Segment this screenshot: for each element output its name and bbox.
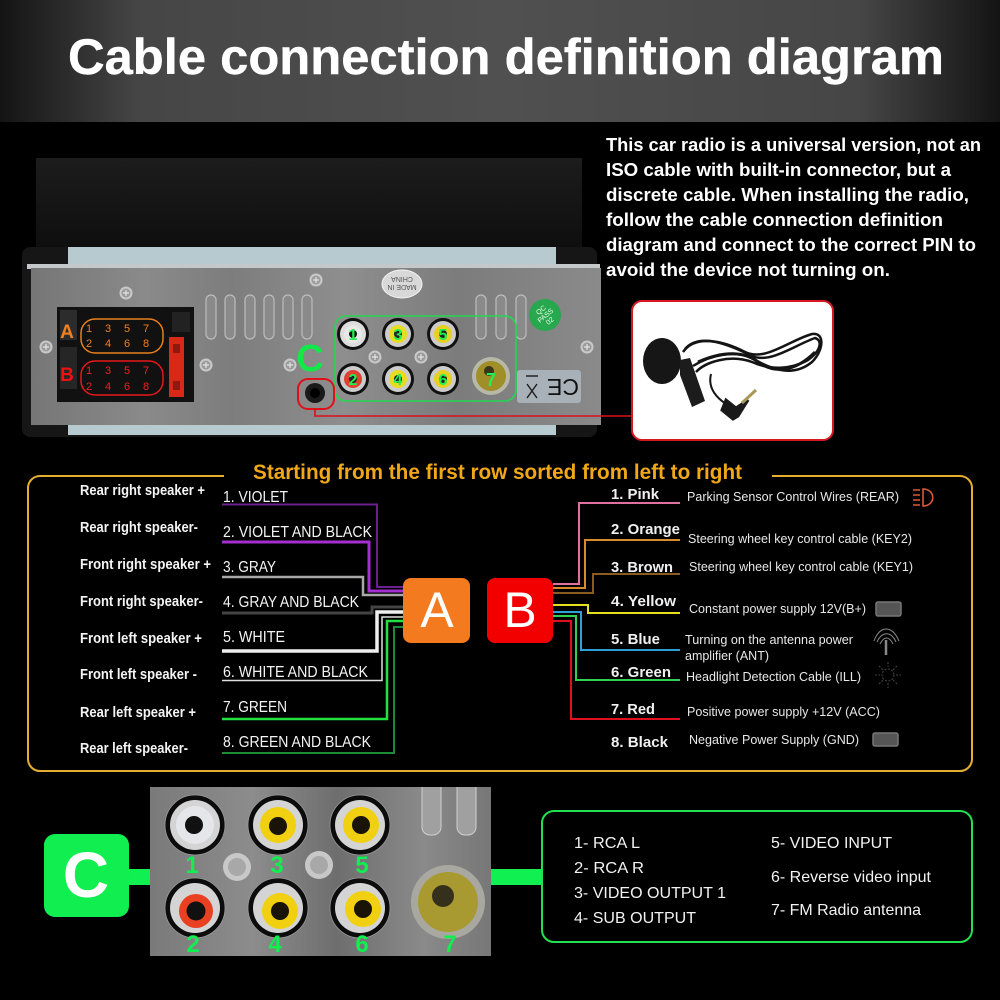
vents <box>150 775 491 835</box>
connector A function labels: Rear left speaker- <box>80 740 188 757</box>
icon: battery constant power <box>876 602 901 616</box>
connector B: 5 <box>124 365 130 377</box>
connector B descriptions <box>685 490 913 747</box>
connector A function labels: Front right speaker + <box>80 556 211 573</box>
letter C: C <box>296 338 324 380</box>
connector B wires <box>553 503 680 719</box>
connector B: 1 <box>86 365 92 377</box>
connector A wire names: 5. WHITE <box>223 629 285 646</box>
connector A wire names: 2. VIOLET AND BLACK <box>223 524 372 541</box>
connector B descriptions: Steering wheel key control cable (KEY2) <box>688 532 912 546</box>
connector C photo <box>150 775 491 958</box>
CE label: CE <box>547 374 579 400</box>
RCA jack numbers: 3 <box>394 327 403 344</box>
legend right column <box>771 835 932 919</box>
RCA jack numbers: 4 <box>394 372 403 389</box>
title: Cable connection definition diagram <box>68 29 944 85</box>
connector B descriptions: Headlight Detection Cable (ILL) <box>686 670 861 684</box>
connector A wire names: 6. WHITE AND BLACK <box>223 664 368 681</box>
vents left <box>206 295 312 339</box>
connector B wire names: 1. Pink <box>611 486 660 503</box>
QC pass sticker: PASS <box>537 307 555 325</box>
QC pass sticker <box>529 299 561 331</box>
connector B wire names: 6. Green <box>611 664 671 681</box>
icon: headlight sun <box>875 662 901 688</box>
connector B wire names: 4. Yellow <box>611 593 676 610</box>
connector A badge <box>403 578 470 643</box>
connector A function labels: Rear left speaker + <box>80 704 196 721</box>
connector B: 2 <box>86 381 92 393</box>
connector B: 3 <box>105 365 111 377</box>
connector A wire names: 8. GREEN AND BLACK <box>223 734 371 751</box>
connector A wires <box>222 504 404 753</box>
connector A: 8 <box>143 338 149 350</box>
connector B wire names: 8. Black <box>611 734 669 751</box>
screws <box>40 274 594 372</box>
intro paragraph: ISO cable with built-in connector, but a <box>606 159 952 180</box>
jack numbers: 4 <box>268 931 282 958</box>
connector A function labels: Rear right speaker- <box>80 519 198 536</box>
header band <box>0 0 1000 122</box>
connector A: 7 <box>143 323 149 335</box>
mic jack with red outline <box>298 379 334 409</box>
connector B wire names: 2. Orange <box>611 521 680 538</box>
made in china sticker: CHINA <box>391 275 413 282</box>
jack 6 yellow <box>330 878 390 938</box>
connector A wire names: 4. GRAY AND BLACK <box>223 594 359 611</box>
intro paragraph: diagram and connect to the correct PIN to <box>606 234 976 255</box>
RCA jack numbers: 2 <box>349 372 358 389</box>
legend left column <box>574 835 726 927</box>
connector B descriptions: Constant power supply 12V(B+) <box>689 602 866 616</box>
legend left column: 3- VIDEO OUTPUT 1 <box>574 885 726 902</box>
connector B: 8 <box>143 381 149 393</box>
connector B: 6 <box>124 381 130 393</box>
CE label <box>517 370 581 403</box>
made in china sticker <box>382 270 422 298</box>
connector B badge <box>487 578 553 643</box>
vents right <box>476 295 526 339</box>
jack 2 red <box>165 878 225 938</box>
QC pass sticker: 02 <box>545 316 556 327</box>
bottom light strip <box>68 424 556 435</box>
connector A: 5 <box>124 323 130 335</box>
jack 5 yellow <box>330 795 390 855</box>
jack numbers: 2 <box>186 931 200 958</box>
legend left column: 1- RCA L <box>574 835 640 852</box>
connector B <box>60 361 163 395</box>
chassis bracket <box>22 247 597 437</box>
legend left column: 2- RCA R <box>574 860 644 877</box>
connector B descriptions: Negative Power Supply (GND) <box>689 733 859 747</box>
jack 1 white <box>165 795 225 855</box>
intro paragraph <box>606 134 981 280</box>
connector A wire names: 7. GREEN <box>223 699 287 716</box>
red leader line to microphone <box>315 409 632 416</box>
connector A: 6 <box>124 338 130 350</box>
QC pass sticker: QC <box>535 305 548 317</box>
jack 3 yellow <box>248 795 308 855</box>
connector A wire names <box>223 489 372 751</box>
legend left column: 4- SUB OUTPUT <box>574 910 696 927</box>
icon: parking light <box>913 489 933 506</box>
made in china sticker: MADE IN <box>387 283 417 290</box>
connector A badge: A <box>420 582 454 638</box>
connector A function labels <box>80 482 211 757</box>
top light strip <box>68 247 556 266</box>
intro paragraph: discrete cable. When installing the radio, <box>606 184 969 205</box>
connector B descriptions: Turning on the antenna power <box>685 633 853 647</box>
connector B badge: B <box>503 582 537 638</box>
connector B descriptions: Positive power supply +12V (ACC) <box>687 705 880 719</box>
jack numbers: 6 <box>355 931 369 958</box>
jack numbers <box>185 852 457 958</box>
connector A wire names: 1. VIOLET <box>223 489 288 506</box>
jack numbers: 5 <box>355 852 369 879</box>
connector B descriptions: Parking Sensor Control Wires (REAR) <box>687 490 899 504</box>
microphone photo panel <box>632 301 833 440</box>
connector C legend panel <box>542 811 972 942</box>
connector A wire names: 3. GRAY <box>223 559 276 576</box>
fuse <box>169 337 184 397</box>
legend right column: 7- FM Radio antenna <box>771 902 921 919</box>
connector A: A <box>60 322 74 343</box>
green outline around RCA group <box>335 316 516 401</box>
metal plate <box>27 264 601 425</box>
jack 7 antenna <box>411 865 485 939</box>
intro paragraph: avoid the device not turning on. <box>606 259 890 280</box>
screws <box>223 851 333 881</box>
jack numbers: 7 <box>443 931 457 958</box>
connector B wire names <box>611 486 680 751</box>
connector B wire names: 3. Brown <box>611 559 673 576</box>
connector A function labels: Front right speaker- <box>80 593 203 610</box>
connector B: 4 <box>105 381 111 393</box>
connector B: 7 <box>143 365 149 377</box>
connector A function labels: Front left speaker + <box>80 630 202 647</box>
panel heading: Starting from the first row sorted from left to right <box>253 460 742 484</box>
connector A: 3 <box>105 323 111 335</box>
legend right column: 5- VIDEO INPUT <box>771 835 892 852</box>
jack numbers: 3 <box>270 852 284 879</box>
intro paragraph: follow the cable connection definition <box>606 209 943 230</box>
RCA jack numbers: 5 <box>439 327 448 344</box>
connector A: 1 <box>86 323 92 335</box>
connector B descriptions: Steering wheel key control cable (KEY1) <box>689 560 913 574</box>
icon: antenna <box>874 629 899 655</box>
connector A function labels: Rear right speaker + <box>80 482 205 499</box>
RCA jack numbers: 7 <box>486 370 496 390</box>
legend right column: 6- Reverse video input <box>771 869 932 886</box>
connector block <box>57 307 194 402</box>
connector B wire names: 5. Blue <box>611 631 660 648</box>
RCA jacks <box>337 318 510 395</box>
jack 4 yellow <box>248 878 308 938</box>
connector B wire names: 7. Red <box>611 701 655 718</box>
RCA jack numbers: 1 <box>349 327 358 344</box>
intro paragraph: This car radio is a universal version, not an <box>606 134 981 155</box>
connector A function labels: Front left speaker - <box>80 666 197 683</box>
connector A: 4 <box>105 338 111 350</box>
connector C badge <box>44 834 129 917</box>
connector A <box>60 319 163 353</box>
RCA jack numbers: 6 <box>439 372 448 389</box>
radio rear photo <box>22 158 601 437</box>
connector C badge: C <box>63 839 109 911</box>
icon: battery ground <box>873 733 898 746</box>
jack numbers: 1 <box>185 852 199 879</box>
back panel <box>36 158 582 250</box>
connector B descriptions: amplifier (ANT) <box>685 649 769 663</box>
connector B: B <box>60 365 74 386</box>
green link bars <box>129 869 542 885</box>
pin definition panel outline <box>28 476 972 771</box>
connector A: 2 <box>86 338 92 350</box>
icon: microphone cable <box>643 334 821 419</box>
RCA jack numbers <box>349 327 496 390</box>
